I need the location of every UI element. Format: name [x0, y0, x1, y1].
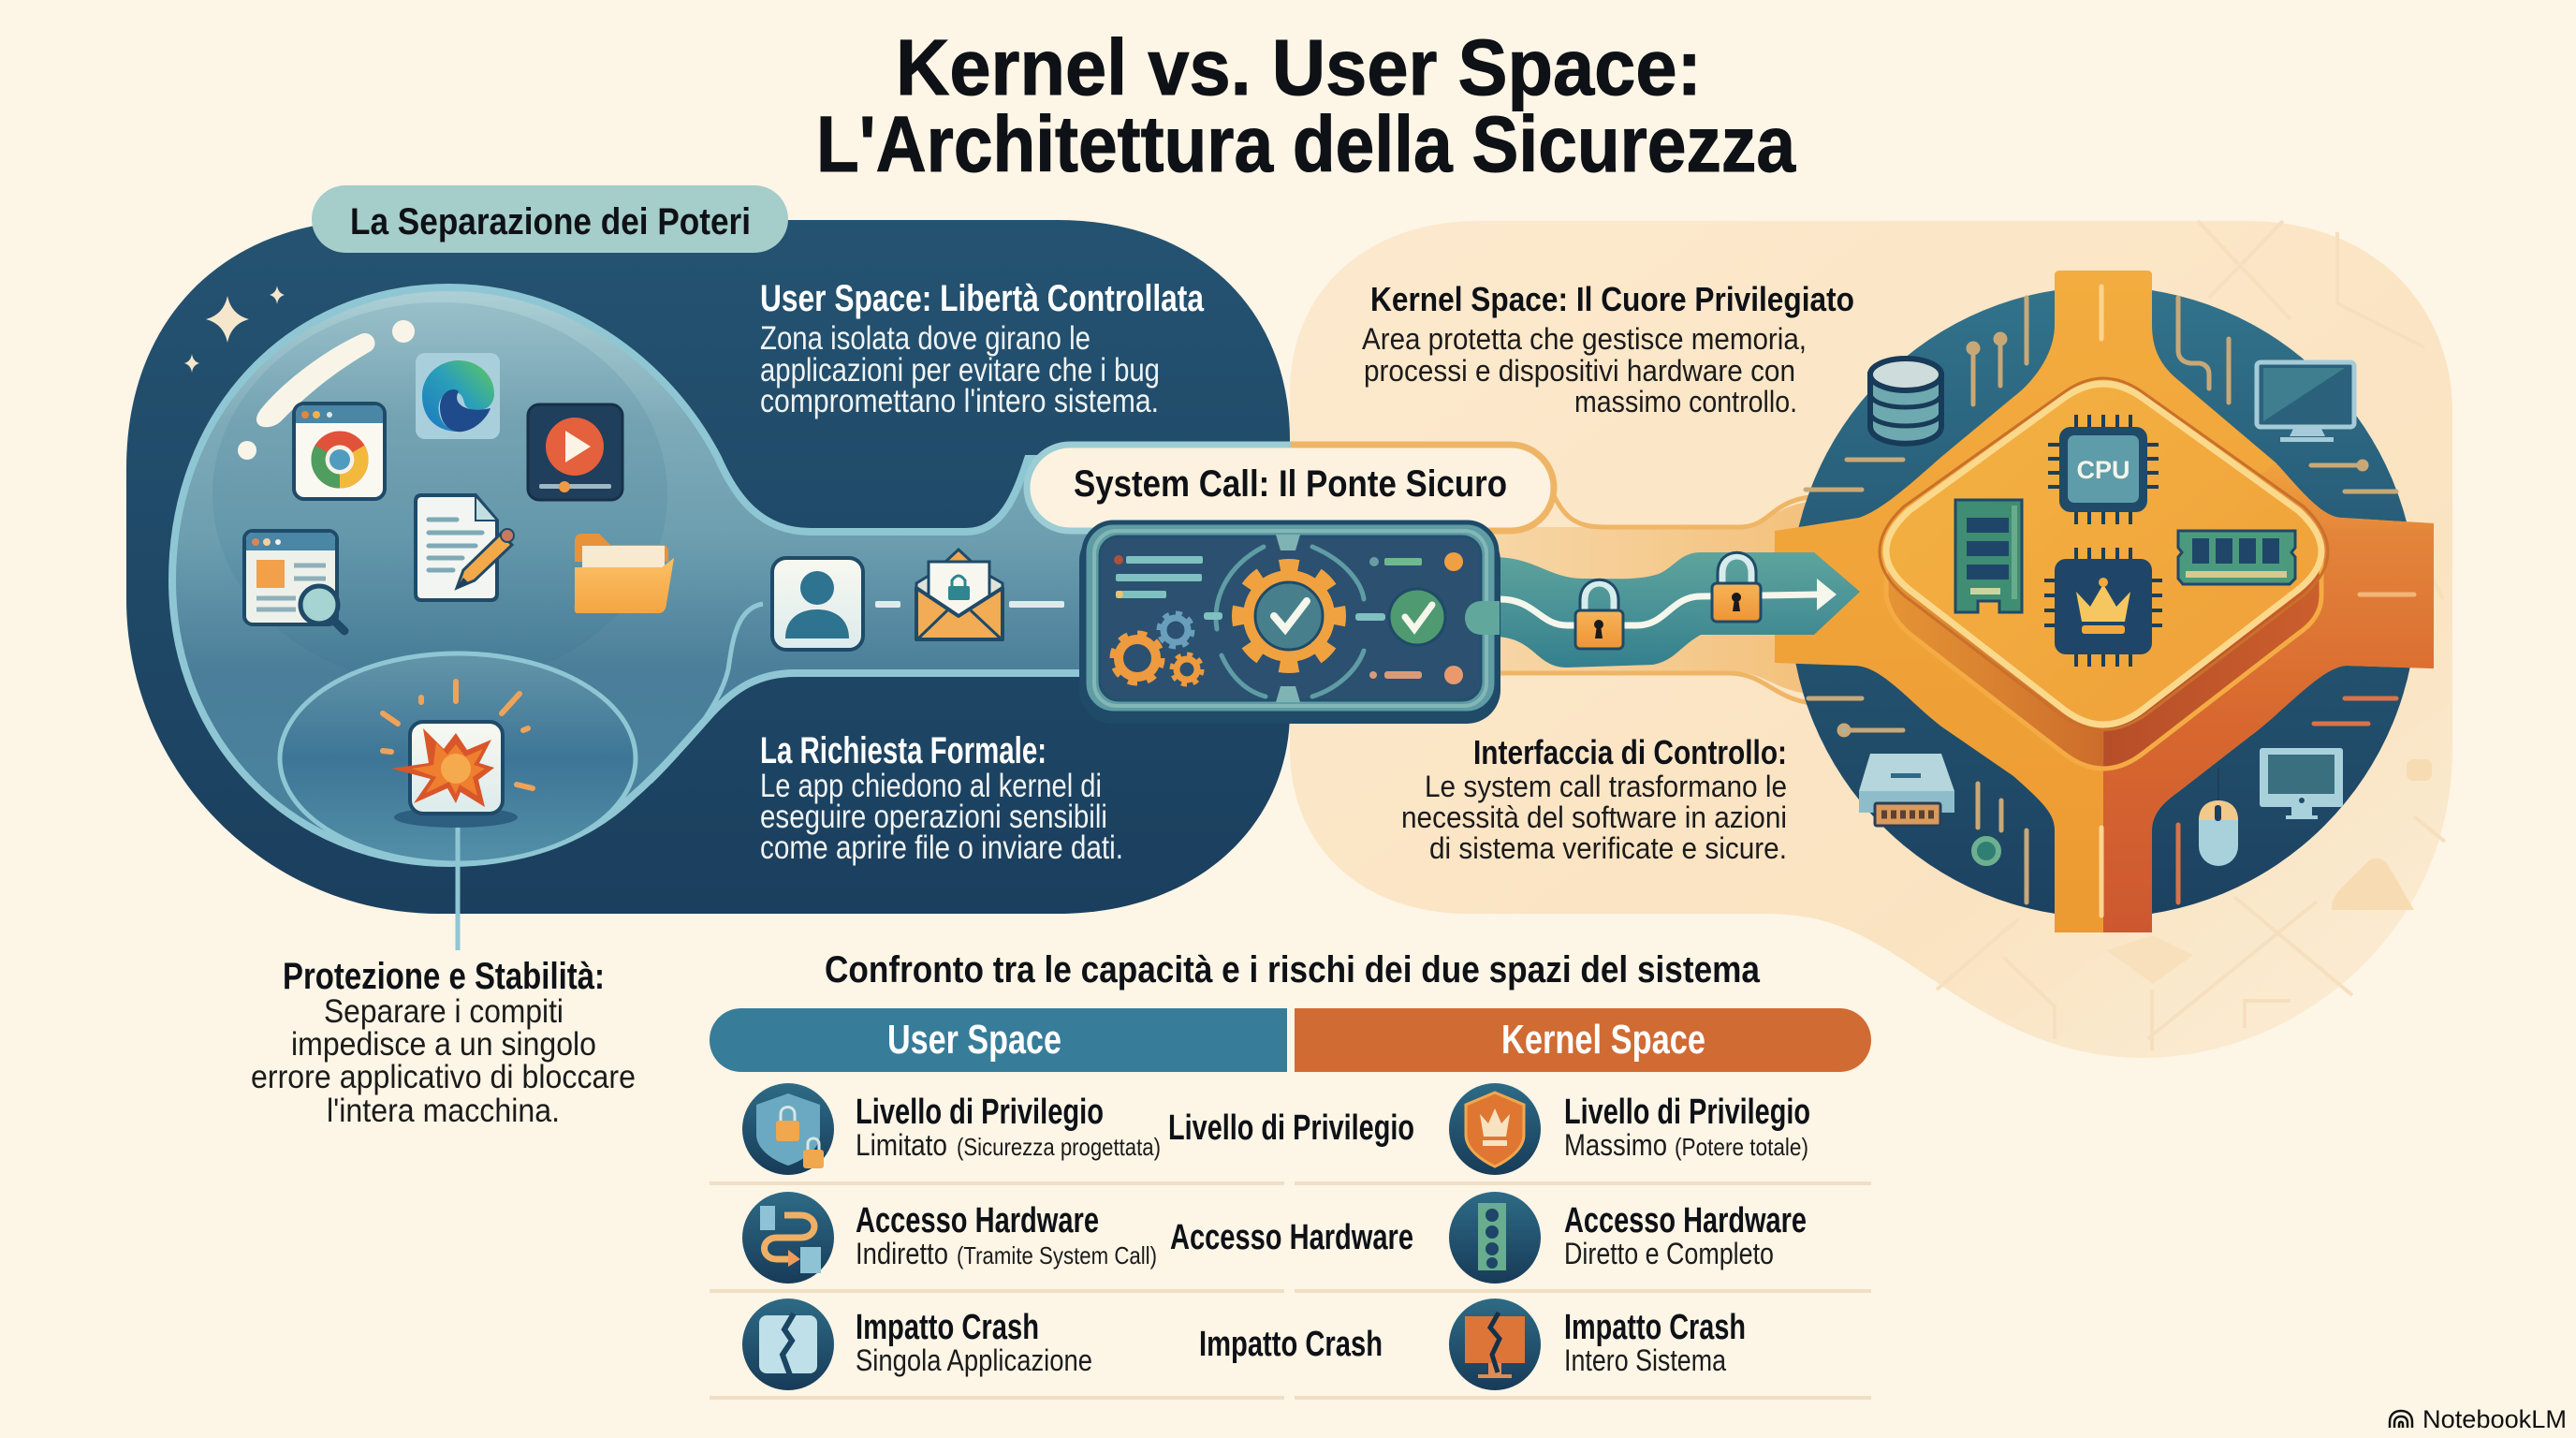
formal request text: [760, 730, 1123, 866]
table header: kernel space: [1295, 1008, 1871, 1072]
icon: lock two: [1712, 552, 1761, 622]
formal request text: eseguire operazioni sensibili: [760, 799, 1107, 835]
bubble highlight: [238, 320, 415, 460]
row text: kernel privilege: (Potere totale): [1675, 1133, 1808, 1161]
user space text: compromettano l'intero sistema.: [760, 383, 1159, 419]
row text: user hardware: Indiretto: [856, 1237, 948, 1270]
user space text: applicazioni per evitare che i bug: [760, 352, 1160, 389]
row text: user crash: Impatto Crash: [856, 1308, 1039, 1347]
pill: System Call: System Call: Il Ponte Sicuro: [1074, 463, 1507, 505]
kernel hub: [1775, 271, 2434, 932]
control interface text: Interfaccia di Controllo:: [1473, 733, 1787, 771]
comparison heading: Confronto tra le capacità e i rischi dei due spazi del sistema: [825, 949, 1761, 990]
row text: kernel crash: Intero Sistema: [1564, 1343, 1726, 1377]
formal request text: come aprire file o inviare dati.: [760, 829, 1123, 866]
control interface text: Le system call trasformano le: [1425, 770, 1787, 803]
icon: browser with magnifier: [244, 531, 344, 631]
row text: kernel hardware: [1564, 1201, 1807, 1270]
user space text: [760, 278, 1205, 419]
pill: System Call: [1027, 445, 1554, 531]
kernel space text: processi e dispositivi hardware con: [1364, 354, 1795, 388]
row text: kernel privilege: Livello di Privilegio: [1564, 1093, 1810, 1132]
icon: sparkles: [184, 286, 285, 373]
user space bubble and neck: [172, 287, 1095, 863]
icon: green check: [1389, 589, 1445, 645]
title: [816, 23, 1796, 188]
system call chip: [1079, 522, 1500, 724]
middle label: crash: Impatto Crash: [1199, 1325, 1383, 1364]
row text: user crash: [856, 1308, 1092, 1377]
platform top: [1886, 384, 2321, 725]
icon: CPU chip: [2048, 415, 2159, 524]
table header: kernel space: Kernel Space: [1501, 1017, 1705, 1063]
middle label: hardware: Accesso Hardware: [1170, 1218, 1413, 1257]
arm glints: [2101, 286, 2414, 916]
icon: printer box: [1859, 754, 1954, 826]
row text: user privilege: (Sicurezza progettata): [957, 1133, 1161, 1161]
row text: user crash: Singola Applicazione: [856, 1343, 1092, 1377]
table dividers: [710, 1181, 1871, 1400]
panel: kernel space background: [1290, 221, 2452, 1058]
user space text: Zona isolata dove girano le: [760, 320, 1090, 357]
user space text: User Space: Libertà Controllata: [760, 278, 1205, 319]
row text: kernel privilege: Massimo: [1564, 1128, 1667, 1162]
icon: cracked monitor: [1449, 1299, 1541, 1390]
circuit traces: [1806, 298, 2396, 902]
icon: main gear with check: [1238, 565, 1339, 667]
protection note: impedisce a un singolo: [291, 1026, 596, 1063]
protection note: Separare i compiti: [324, 993, 564, 1030]
row text: kernel crash: Impatto Crash: [1564, 1308, 1746, 1347]
table header: user space: User Space: [887, 1017, 1061, 1063]
icon: user tile: [772, 558, 863, 650]
icon: direct memory module: [1449, 1192, 1541, 1284]
data bars: [1114, 552, 1463, 684]
section pill: La Separazione dei Poteri: La Separazione dei Poteri: [350, 201, 751, 242]
kernel space text: Kernel Space: Il Cuore Privilegiato: [1370, 280, 1854, 318]
icon: sealed envelope with lock: [916, 550, 1003, 639]
row text: kernel crash: [1564, 1308, 1746, 1377]
formal request text: La Richiesta Formale:: [760, 730, 1046, 771]
platform extrusion: [1886, 552, 2321, 769]
crash lens: [280, 653, 636, 950]
title: L'Architettura della Sicurezza: [816, 100, 1796, 188]
protection note: errore applicativo di bloccare: [251, 1059, 636, 1095]
connector dashes: [875, 601, 1064, 608]
title: Kernel vs. User Space:: [896, 23, 1702, 111]
hub circle: [1790, 286, 2417, 917]
table header: user space: [710, 1008, 1287, 1072]
row text: user hardware: (Tramite System Call): [957, 1241, 1157, 1269]
icon: database: [1870, 359, 1941, 444]
ribbon plug: [1465, 601, 1500, 635]
panel: user space background: [126, 220, 1290, 914]
orbit arcs: [1216, 547, 1364, 697]
icon: crash explosion: [383, 682, 533, 828]
row text: user privilege: Livello di Privilegio: [856, 1093, 1104, 1132]
control interface text: [1401, 733, 1787, 865]
protection note: Protezione e Stabilità:: [283, 956, 605, 997]
row text: user privilege: [856, 1093, 1161, 1162]
icon: chrome window: [294, 404, 385, 499]
secure ribbon with arrow: [1493, 552, 1860, 668]
icon: crown chip: [2044, 548, 2162, 667]
protection note: [251, 956, 636, 1129]
icon: CPU chip: CPU: [2076, 456, 2130, 484]
orange cross and flares: [1775, 271, 2434, 932]
icon: lock one: [1575, 580, 1623, 649]
formal request text: Le app chiedono al kernel di: [760, 768, 1102, 804]
row text: kernel hardware: Diretto e Completo: [1564, 1237, 1774, 1270]
notebooklm mark: NotebookLM: [2422, 1405, 2567, 1433]
peach connector band: [1488, 487, 1825, 704]
icon: RAM stick: [2178, 531, 2295, 584]
row text: user hardware: Accesso Hardware: [856, 1201, 1099, 1240]
icon: circuit green node: [1974, 839, 1998, 863]
icon: document with pencil: [416, 495, 514, 600]
control interface text: di sistema verificate e sicure.: [1429, 831, 1787, 865]
connector line to stability note: [455, 810, 461, 950]
section pill: La Separazione dei Poteri: [312, 185, 788, 253]
icon: mouse: [2199, 768, 2238, 866]
row text: user hardware: [856, 1201, 1157, 1270]
kernel space text: massimo controllo.: [1574, 385, 1797, 418]
control interface text: necessità del software in azioni: [1401, 800, 1787, 834]
icon: crown shield: [1449, 1083, 1541, 1175]
kernel space text: Area protetta che gestisce memoria,: [1362, 322, 1807, 356]
icon: shield with locks: [742, 1083, 834, 1175]
icon: green memory module: [1955, 500, 2022, 612]
icon: small gears: [1113, 613, 1202, 684]
icon: cracked app tile: [742, 1299, 834, 1390]
icon: folder: [575, 534, 674, 613]
icon: video player: [528, 404, 622, 500]
icon: edge tile: [416, 353, 500, 439]
row text: kernel privilege: [1564, 1093, 1810, 1162]
icon: lower monitor: [2260, 748, 2343, 819]
icon: top monitor: [2257, 362, 2354, 442]
row text: user privilege: Limitato: [856, 1128, 947, 1162]
row text: kernel hardware: Accesso Hardware: [1564, 1201, 1807, 1240]
icon: indirect hardware route: [742, 1192, 834, 1284]
kernel space text: [1362, 280, 1854, 418]
chip body: [1079, 527, 1500, 724]
middle label: privilege: Livello di Privilegio: [1168, 1108, 1414, 1148]
protection note: l'intera macchina.: [327, 1093, 560, 1129]
